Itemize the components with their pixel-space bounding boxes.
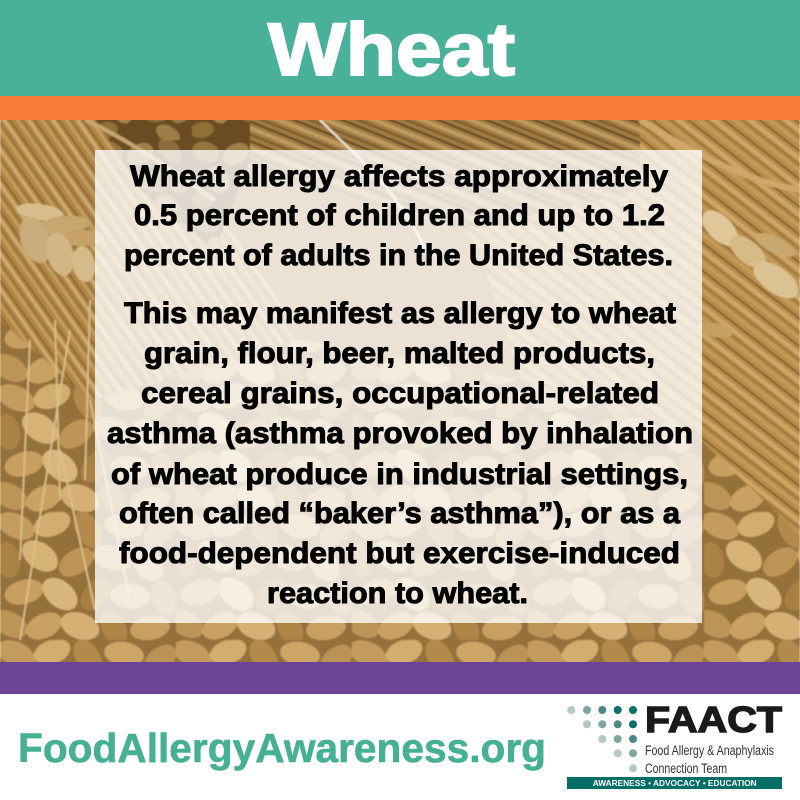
wheat photo background [0, 110, 800, 670]
logo dots [567, 706, 637, 772]
FAACT logo [567, 699, 782, 789]
straw, right [472, 120, 800, 534]
paragraph 2: of wheat produce in industrial settings, [111, 458, 688, 491]
website link: FoodAllergyAwareness.org [18, 725, 546, 771]
paragraph 2: This may manifest as allergy to wheat [124, 297, 676, 330]
purple band [0, 662, 800, 694]
title: Wheat [268, 8, 515, 91]
wheat ear, left [16, 202, 97, 283]
logo wordmark: FAACT [645, 699, 782, 740]
paragraph 2: grain, flour, beer, malted products, [144, 337, 655, 370]
straw, left [0, 110, 300, 400]
paragraph 2: reaction to wheat. [267, 577, 528, 610]
grains, top strip [96, 120, 251, 248]
left stray awns [20, 120, 800, 640]
paragraph 2: often called “baker’s asthma”), or as a [119, 497, 680, 530]
logo tagline bar: AWARENESS • ADVOCACY • EDUCATION [593, 778, 757, 788]
title band [0, 0, 800, 96]
paragraph 1: percent of adults in the United States. [124, 239, 673, 272]
paragraph 2 [107, 297, 693, 610]
wheat ear, right [696, 204, 800, 340]
paragraph 2: asthma (asthma provoked by inhalation [107, 417, 693, 450]
logo tagline bar [567, 777, 782, 789]
logo subtitle: Connection Team [645, 761, 727, 776]
paragraph 1 [124, 160, 673, 272]
orange band [0, 96, 800, 120]
paragraph 2: cereal grains, occupational-related [141, 377, 659, 410]
logo subtitle [645, 743, 774, 776]
paragraph 1: Wheat allergy affects approximately [130, 160, 668, 193]
paragraph 1: 0.5 percent of children and up to 1.2 [134, 199, 665, 232]
grains, lower area [0, 320, 800, 670]
straw, top middle [250, 110, 640, 230]
translucent text panel [95, 150, 702, 623]
paragraph 2: food-dependent but exercise-induced [119, 537, 680, 570]
